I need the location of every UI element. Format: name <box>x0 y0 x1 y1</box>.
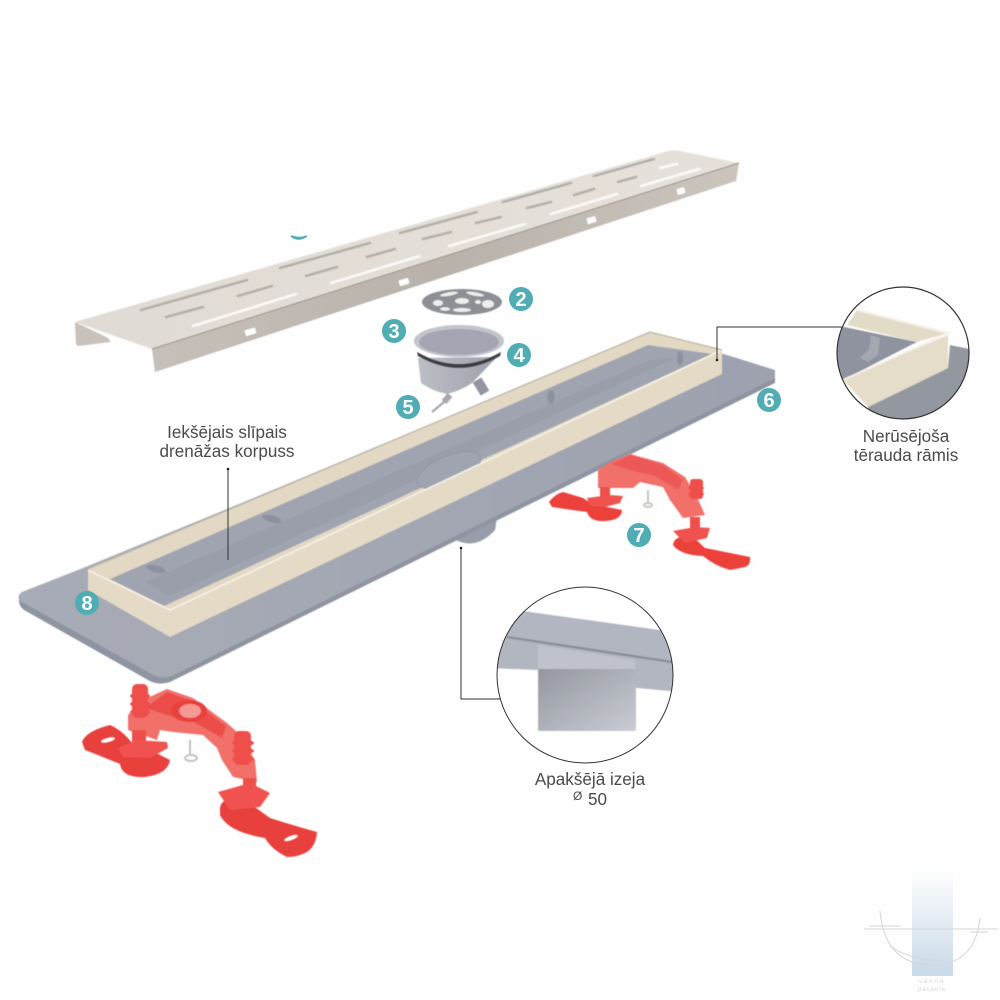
large clamp right wing nut <box>218 783 270 810</box>
callout line: frame <box>716 327 842 361</box>
label: inner sloped drainage body: drenāžas korpuss <box>160 442 294 461</box>
large clamp stems <box>132 730 256 792</box>
small clamp top face <box>612 455 683 490</box>
grate cover <box>75 150 739 372</box>
large clamp left foot <box>82 725 170 777</box>
cover left return flange <box>75 322 111 346</box>
frame detail background <box>846 328 912 354</box>
frame detail back wall <box>847 310 948 342</box>
frame detail outline <box>837 287 969 419</box>
large clamp screw <box>185 740 197 761</box>
frame back wall <box>88 332 722 610</box>
badge 6 <box>757 388 781 412</box>
badge 3 <box>382 319 406 343</box>
cover edge highlight <box>152 163 739 349</box>
large clamp arch <box>128 689 257 782</box>
teal badge fragment <box>291 236 307 239</box>
watermark logo: vannu <box>919 979 945 985</box>
label: stainless steel frame: tērauda rāmis <box>854 446 958 465</box>
cover front flange <box>152 163 739 372</box>
frame detail front face <box>843 335 948 407</box>
channel floor stripe <box>145 358 675 596</box>
frame detail plate <box>868 344 968 418</box>
badge 3: 3 <box>388 321 400 343</box>
frame detail bolt <box>860 335 880 362</box>
large clamp right foot <box>220 799 317 857</box>
label: stainless steel frame: Nerūsējoša <box>863 427 950 446</box>
outlet detail collar <box>538 646 636 669</box>
zoom circle: lower outlet <box>490 585 680 765</box>
cup body <box>418 357 497 394</box>
badge 7: 7 <box>633 525 645 547</box>
frame detail rim <box>843 310 948 380</box>
callout line: inner body <box>227 468 229 560</box>
badge 4 <box>507 343 531 367</box>
large clamp hex inner <box>179 704 201 718</box>
small clamp screw <box>644 490 652 507</box>
clamp: small <box>549 454 750 570</box>
large clamp right bolt <box>232 731 254 765</box>
zoom circle: stainless frame <box>836 286 970 420</box>
cover middle slots <box>166 177 636 317</box>
plate top surface <box>18 336 775 677</box>
label: lower outlet: Apakšējā izeja <box>535 770 646 789</box>
small clamp stems <box>600 487 700 529</box>
small clamp right nut <box>673 527 710 543</box>
badge 5: 5 <box>402 397 414 419</box>
clamp: large <box>82 684 317 857</box>
plate outlet pipe <box>452 512 498 543</box>
cup O-ring <box>417 352 501 368</box>
frame front face <box>88 350 722 637</box>
badge 6: 6 <box>763 390 775 412</box>
badge 7 <box>627 523 651 547</box>
frame top rim <box>88 350 722 610</box>
channel interior <box>110 345 712 606</box>
small clamp left nut <box>587 495 623 507</box>
label: outlet diameter: Ø <box>573 789 582 803</box>
large clamp hex socket <box>171 700 207 722</box>
cover top surface <box>75 150 739 349</box>
small clamp right foot <box>673 536 750 570</box>
label: outlet diameter: 50 <box>588 790 607 809</box>
cup spout <box>477 380 485 393</box>
strainer part <box>422 289 502 315</box>
large clamp slots <box>101 736 115 744</box>
cup interior <box>419 329 499 355</box>
outlet detail background <box>500 671 538 700</box>
watermark logo: pasaule <box>918 987 946 993</box>
badge 2: 2 <box>515 289 527 311</box>
callout line: outlet <box>460 547 530 699</box>
cover back slots <box>141 159 654 310</box>
large clamp arch top face <box>145 692 226 738</box>
stainless frame and channel <box>88 332 722 637</box>
channel drain hole <box>412 444 486 496</box>
label: inner sloped drainage body: Iekšējais slīpais <box>167 423 287 442</box>
channel bolts <box>145 351 683 575</box>
drain base plate <box>18 336 775 684</box>
plate side edge <box>19 370 775 684</box>
small clamp bolt <box>688 479 704 499</box>
cup pin <box>432 395 450 412</box>
cup rim <box>414 325 504 357</box>
small clamp arch <box>598 454 705 518</box>
large clamp left bolt <box>130 684 150 718</box>
cover front white slots <box>193 164 699 326</box>
outlet detail groove <box>507 637 672 662</box>
watermark logo <box>864 868 998 993</box>
drain cup <box>414 325 504 412</box>
outlet detail pipe box <box>538 669 636 731</box>
outlet detail outline <box>497 587 673 763</box>
outlet detail plate band <box>490 611 680 692</box>
badge 8 <box>75 591 99 615</box>
badge 4: 4 <box>513 345 525 367</box>
badge 5 <box>396 395 420 419</box>
frame back rim <box>88 332 722 569</box>
small clamp left foot <box>549 492 622 521</box>
cover flange holes <box>244 187 686 336</box>
badge 8: 8 <box>81 593 93 615</box>
large clamp left wing nut <box>118 740 168 758</box>
frame detail interior <box>838 326 917 380</box>
badge 2 <box>509 287 533 311</box>
